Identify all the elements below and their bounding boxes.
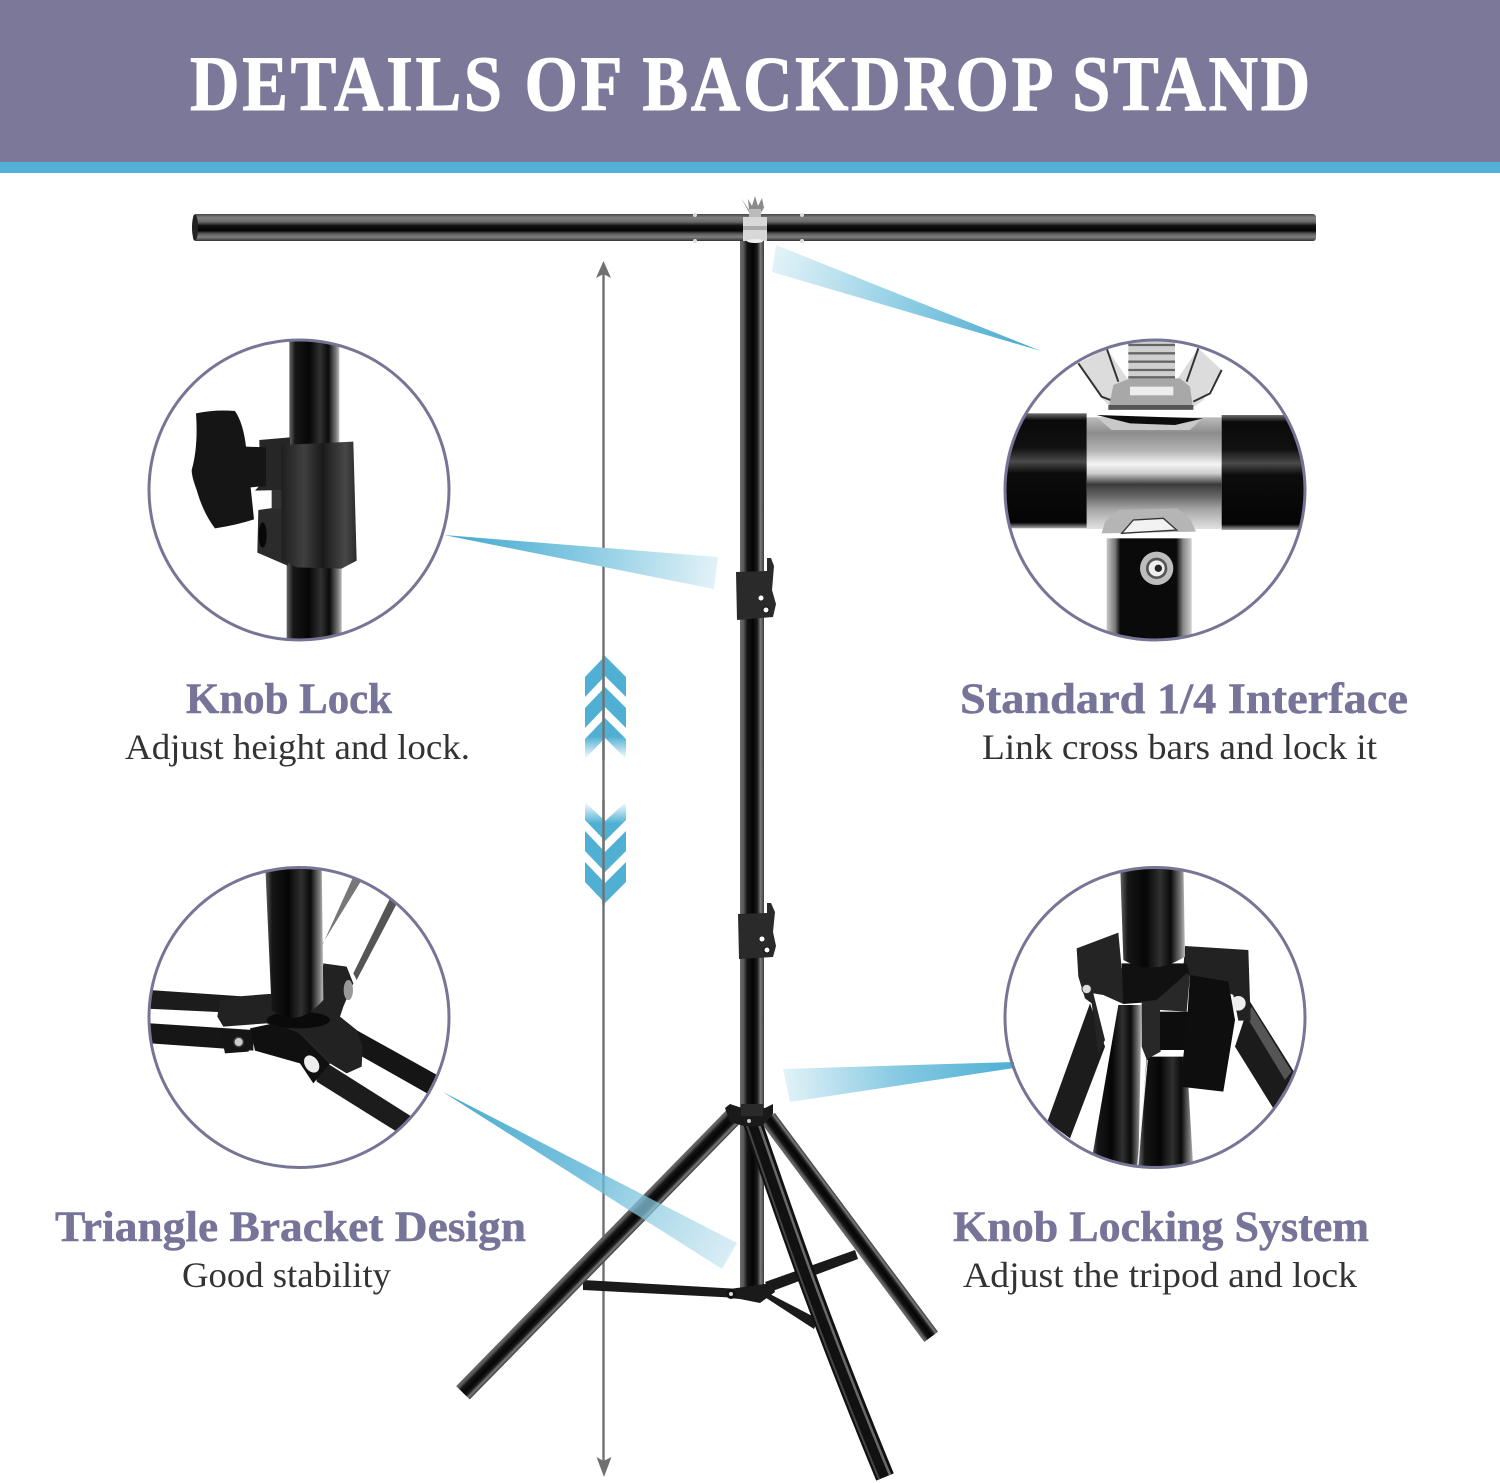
text: link cross bars: Link cross bars and lock it [982,727,1377,767]
upper clamp [736,558,776,620]
top connector [741,196,771,243]
text: good stability: Good stability [182,1255,391,1295]
crossbar [193,214,1316,241]
T-stand photo [192,196,1316,1479]
tripod legs [761,1113,938,1342]
heading: standard interface: Standard 1/4 Interface [960,676,1408,723]
vertical pole [740,240,764,1292]
heading: triangle bracket: Triangle Bracket Design [55,1204,526,1251]
height adjust chevrons up [585,656,626,760]
panel: knob lock detail [149,330,449,650]
height dimension arrow [596,261,612,1477]
heading: knob lock: Knob Lock [186,676,392,723]
panel: knob locking system detail [1005,860,1305,1170]
tripod struts [583,1250,858,1329]
header banner [0,0,1500,173]
callout beam: knob locking system [783,1062,1014,1102]
lower clamp [738,903,776,959]
title: DETAILS OF BACKDROP STAND [190,41,1310,127]
panel: standard interface detail [1004,338,1306,642]
text: adjust the tripod: Adjust the tripod and lock [963,1255,1357,1295]
callout beam: triangle bracket [443,1092,737,1269]
text: adjust height: Adjust height and lock. [125,727,470,767]
callout beam: standard interface [772,245,1041,351]
panel: triangle bracket detail [140,860,449,1168]
height adjust chevrons down [585,800,626,905]
crossbar screws [693,213,804,243]
tripod hub [725,1104,773,1126]
callout beam: knob lock [444,535,718,589]
heading: knob locking system: Knob Locking System [953,1204,1369,1251]
